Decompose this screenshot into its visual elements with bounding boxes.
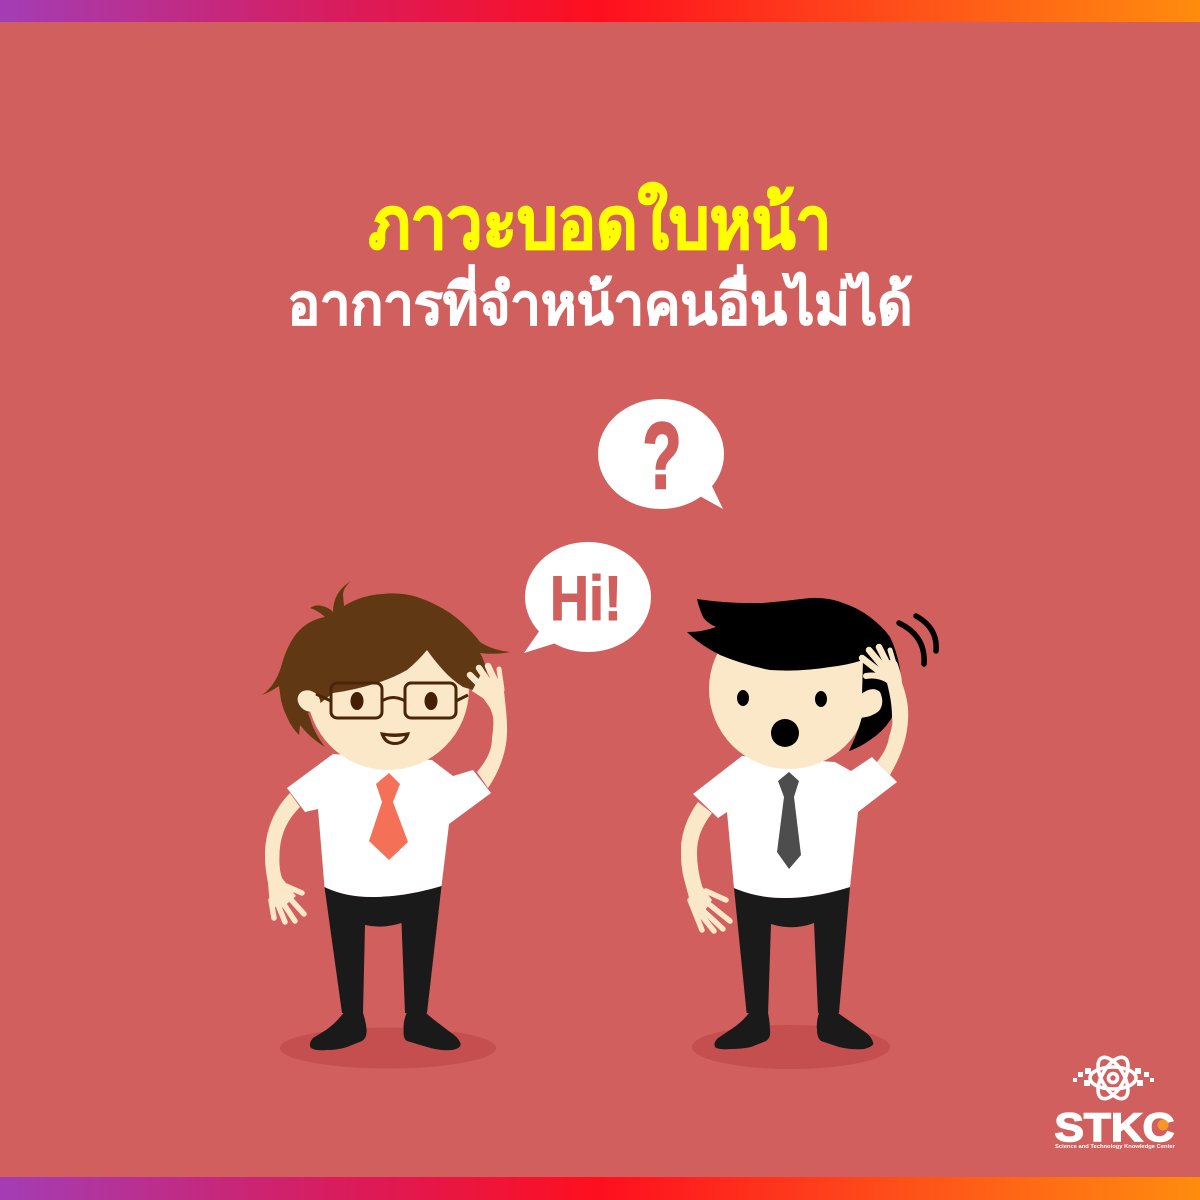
ear: [860, 689, 882, 718]
eyes: [737, 690, 749, 706]
fingers over hair: [470, 666, 505, 712]
tie: [369, 773, 408, 860]
face: [307, 608, 469, 770]
scratch motion arcs: [899, 616, 936, 664]
glasses: [316, 683, 468, 718]
raised arm and hand: [472, 676, 507, 788]
left shoe: [714, 1013, 770, 1049]
shirt: [287, 754, 491, 897]
subtitle: อาการที่จำหน้าคนอื่นไม่ได้: [288, 264, 912, 337]
hanging arm and hand: [681, 802, 730, 931]
top gradient bar: [0, 0, 1200, 22]
left shoe: [310, 1013, 367, 1050]
open mouth: [771, 719, 799, 747]
tagline: Science and Technology Knowledge Center: [1055, 1144, 1176, 1150]
hair: [262, 581, 510, 747]
ground shadow: [280, 1028, 496, 1068]
right shoe: [817, 1013, 873, 1049]
hanging arm and hand: [265, 793, 304, 922]
hair front: [687, 598, 902, 751]
left character: man with glasses: [262, 581, 510, 1068]
orange dot: [1158, 1120, 1168, 1130]
logo dots: [1073, 1068, 1154, 1086]
speech bubble: Hi: [524, 542, 651, 653]
bottom gradient bar: [0, 1177, 1200, 1200]
right character: surprised man: [681, 598, 936, 1069]
eyes: [350, 692, 364, 710]
pants: [734, 887, 850, 1015]
hair back: [849, 620, 902, 751]
speech bubble: question mark: [598, 399, 724, 509]
tie: [777, 772, 801, 869]
mouth: [380, 732, 410, 745]
raised arm and hand: [862, 647, 908, 775]
title: ภาวะบอดใบหน้า: [368, 181, 832, 264]
logo: STKC: [1054, 1053, 1176, 1150]
pants: [324, 886, 442, 1013]
speech bubble: question mark: ?: [642, 403, 682, 508]
shirt: [693, 756, 897, 898]
icon: atom: [1090, 1053, 1136, 1103]
face: [709, 609, 869, 769]
ear: [293, 686, 325, 716]
speech bubble: Hi: Hi!: [550, 564, 622, 634]
wordmark: STKC: [1054, 1106, 1174, 1150]
right shoe: [404, 1013, 461, 1050]
ground shadow: [692, 1025, 890, 1069]
